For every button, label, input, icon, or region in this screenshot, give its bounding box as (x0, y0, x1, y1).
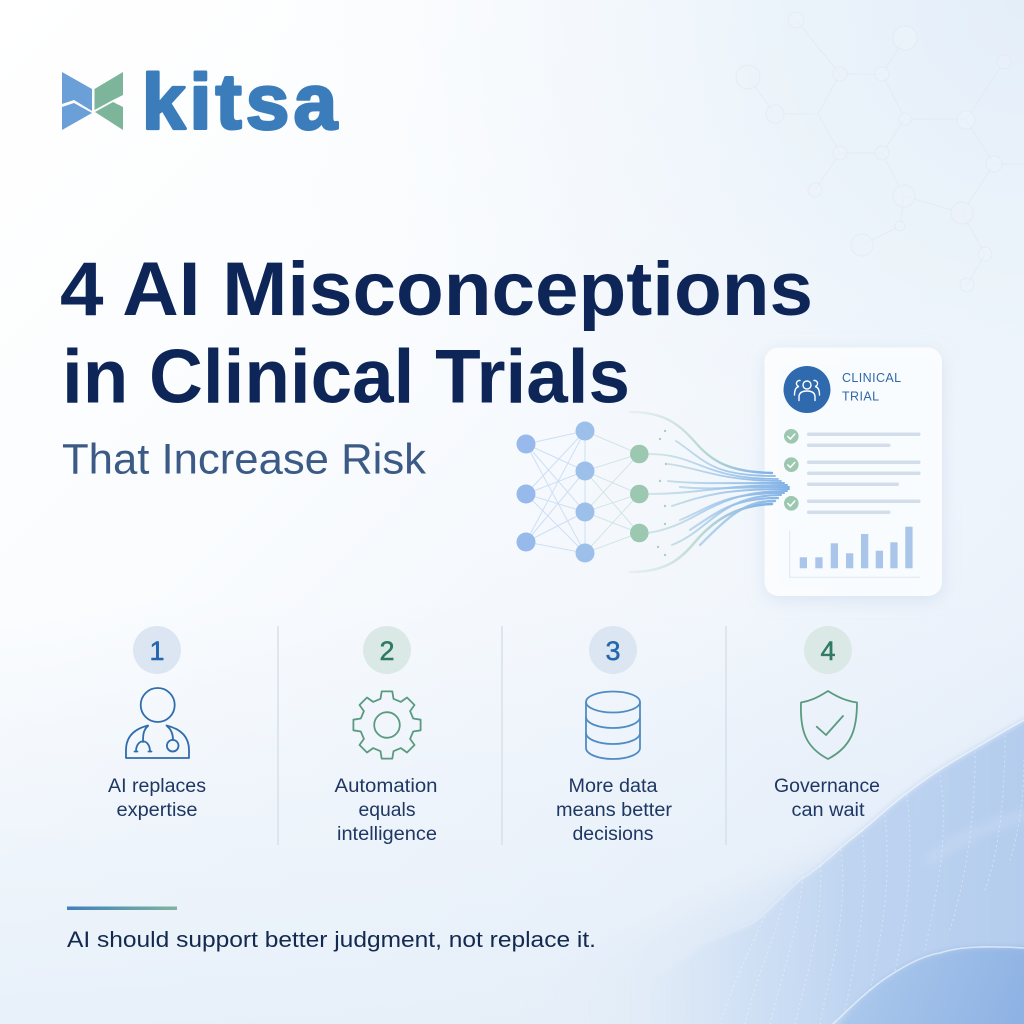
card heading: TRIAL (842, 390, 879, 404)
mini bar chart (790, 527, 920, 577)
title (60, 247, 813, 420)
label 3: More data (568, 776, 658, 797)
title: 4 AI Misconceptions (60, 247, 813, 332)
hidden nodes (576, 422, 594, 562)
subtitle: That Increase Risk (62, 436, 427, 484)
number badge 1: 1 (149, 636, 165, 666)
item 2: Automation equals intelligence (334, 626, 438, 845)
label 1: AI replaces (108, 776, 206, 797)
label 3 (556, 776, 673, 845)
icon: database (586, 692, 640, 759)
item 3: More data means better decisions (556, 626, 673, 845)
card heading (842, 371, 901, 404)
input nodes (516, 434, 536, 552)
checklist text lines (807, 432, 920, 514)
scattered dots (657, 430, 667, 556)
number badge 4 (804, 626, 852, 674)
footer statement: AI should support better judgment, not replace it. (67, 927, 596, 952)
icon: gear (353, 691, 421, 759)
footer accent rule (67, 906, 177, 910)
icon: shield check (801, 691, 857, 759)
label 4 (774, 776, 880, 821)
number badge 2: 2 (379, 636, 395, 666)
molecule decoration (736, 12, 1024, 292)
number badge 3 (589, 626, 637, 674)
icon: doctor (126, 688, 189, 758)
label 3: means better (556, 800, 673, 821)
output nodes (630, 445, 649, 542)
number badge 2 (363, 626, 411, 674)
checklist ticks (784, 429, 799, 511)
label 2: Automation (334, 776, 438, 797)
logo wordmark: kitsa (142, 58, 338, 146)
column dividers (278, 626, 726, 845)
label 2: intelligence (337, 824, 437, 845)
label 3: decisions (572, 824, 654, 845)
item 1: AI replaces expertise (108, 626, 206, 821)
misconception columns (108, 626, 880, 845)
icon: logo mark (62, 72, 123, 130)
icon: people in circle (784, 366, 830, 413)
title: in Clinical Trials (62, 334, 630, 420)
data flow stream (630, 412, 789, 572)
label 1: expertise (116, 800, 198, 821)
label 4: Governance (774, 776, 880, 797)
card heading: CLINICAL (842, 371, 901, 385)
number badge 3: 3 (605, 636, 621, 666)
logo: kitsa (62, 58, 338, 146)
number badge 4: 4 (820, 636, 836, 666)
network connections (526, 431, 639, 553)
item 4: Governance can wait (774, 626, 880, 821)
neural network (516, 422, 667, 562)
label 2 (334, 776, 438, 845)
panel: clinical trial card (764, 348, 942, 596)
wave decoration (520, 715, 1024, 1024)
label 4: can wait (792, 800, 865, 821)
label 1 (108, 776, 206, 821)
label 2: equals (358, 800, 416, 821)
number badge 1 (133, 626, 181, 674)
